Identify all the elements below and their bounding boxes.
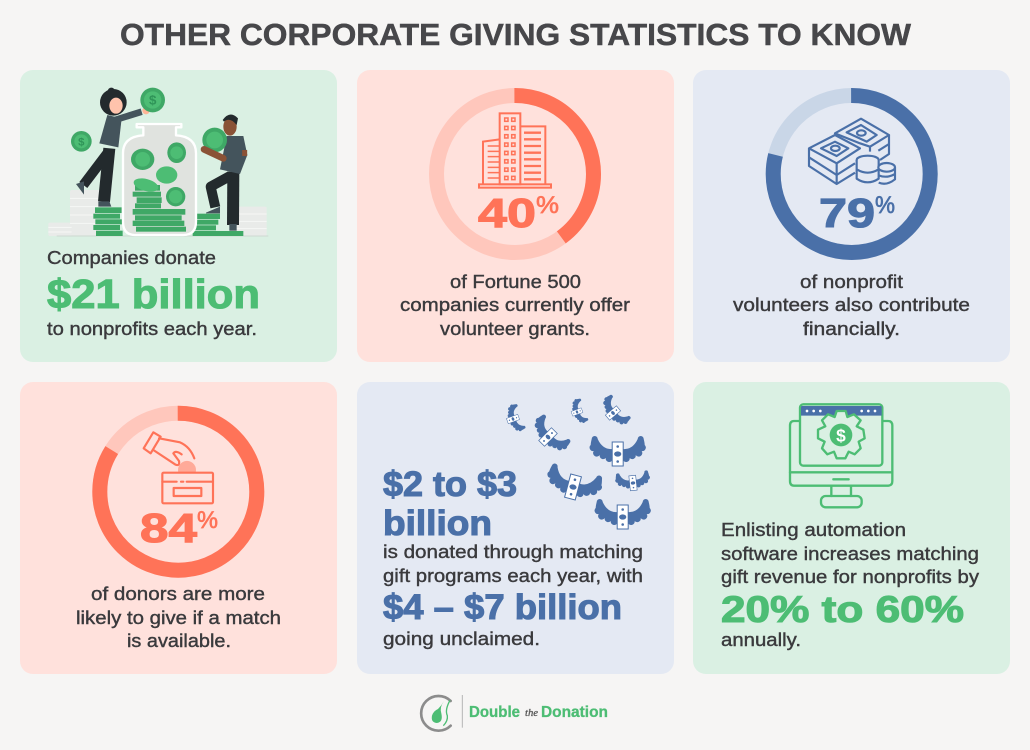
stat: 84%: % bbox=[197, 507, 218, 534]
big number: $4 – $7 billion: $4 – $7 billion bbox=[383, 588, 622, 627]
stat: 40%: 40 bbox=[478, 190, 536, 236]
icon: monitor with gear and dollar bbox=[790, 404, 892, 507]
icon: logo mark bbox=[421, 695, 462, 731]
title: OTHER CORPORATE GIVING STATISTICS TO KNOW bbox=[120, 17, 912, 52]
wordmark: Donation bbox=[541, 704, 608, 721]
icon: office buildings bbox=[479, 113, 551, 188]
big number: $2 to $3 billion: billion bbox=[383, 504, 492, 543]
text: Fortune 500 description: of Fortune 500 bbox=[450, 271, 581, 292]
stat: 84% bbox=[140, 505, 218, 551]
wordmark: Double bbox=[469, 704, 520, 721]
text: volunteers description: of nonprofit bbox=[800, 271, 903, 292]
icon: hand dropping coin in box bbox=[144, 432, 213, 503]
stat: 79%: 79 bbox=[819, 190, 875, 236]
big number: $2 to $3 billion: $2 to $3 bbox=[383, 465, 517, 504]
wordmark: the bbox=[525, 707, 538, 719]
big number: $2 to $3 billion bbox=[383, 465, 517, 543]
stat: 79% bbox=[819, 190, 895, 236]
text: volunteers description: volunteers also contribute bbox=[733, 294, 970, 315]
panel: 84% donors bbox=[20, 382, 337, 674]
text: Fortune 500 description: volunteer grants. bbox=[440, 318, 590, 339]
text: donated through matching: is donated through matching bbox=[383, 541, 643, 562]
stat: 40% bbox=[478, 190, 559, 236]
text: enlisting automation bbox=[721, 519, 980, 587]
text: donors description: is available. bbox=[127, 630, 231, 651]
illustration: people adding coins to jar: $ bbox=[149, 93, 157, 108]
text: enlisting automation: Enlisting automation bbox=[721, 519, 906, 540]
panel: 79% volunteers bbox=[693, 70, 1010, 362]
panel: automation software bbox=[693, 382, 1010, 674]
text: donated through matching bbox=[383, 541, 643, 586]
stat: 84%: 84 bbox=[140, 505, 197, 551]
text: to nonprofits each year: to nonprofits each year. bbox=[47, 318, 257, 339]
text: volunteers description bbox=[733, 271, 970, 339]
wordmark bbox=[469, 704, 608, 721]
text: donors description: likely to give if a match bbox=[76, 607, 281, 628]
panel: matching gift programs bbox=[357, 382, 674, 674]
donut chart: 40% bbox=[436, 96, 594, 252]
text: enlisting automation: software increases matching bbox=[721, 543, 979, 564]
donut chart: 84% bbox=[100, 413, 257, 570]
stat: 40%: % bbox=[536, 192, 559, 219]
big number: 20% to 60%: 20% to 60% bbox=[721, 589, 964, 630]
text: donated through matching: gift programs each year, with bbox=[383, 565, 643, 586]
text: going unclaimed: going unclaimed. bbox=[383, 628, 540, 649]
text: Fortune 500 description bbox=[400, 271, 630, 339]
big number: $21 billion: $21 billion bbox=[47, 271, 260, 317]
icon: flying money bbox=[503, 393, 651, 529]
icon: money stacks and coins bbox=[809, 119, 895, 184]
logo: Double the Donation bbox=[421, 695, 608, 731]
text: annually: annually. bbox=[721, 629, 801, 650]
panel: $21 billion donated bbox=[20, 70, 337, 362]
text: Fortune 500 description: companies currently offer bbox=[400, 294, 630, 315]
icon: monitor with gear and dollar: $ bbox=[836, 425, 846, 445]
text: donors description: of donors are more bbox=[91, 583, 265, 604]
stat: 79%: % bbox=[875, 192, 895, 219]
text: volunteers description: financially. bbox=[803, 318, 900, 339]
text: donors description bbox=[76, 583, 281, 651]
text: companies donate: Companies donate bbox=[47, 247, 216, 268]
illustration: people adding coins to jar bbox=[48, 88, 268, 236]
illustration: people adding coins to jar: $ bbox=[78, 136, 85, 148]
donut chart: 79% bbox=[773, 96, 930, 252]
panel: 40% Fortune 500 bbox=[357, 70, 674, 362]
text: enlisting automation: gift revenue for nonprofits by bbox=[721, 566, 980, 587]
